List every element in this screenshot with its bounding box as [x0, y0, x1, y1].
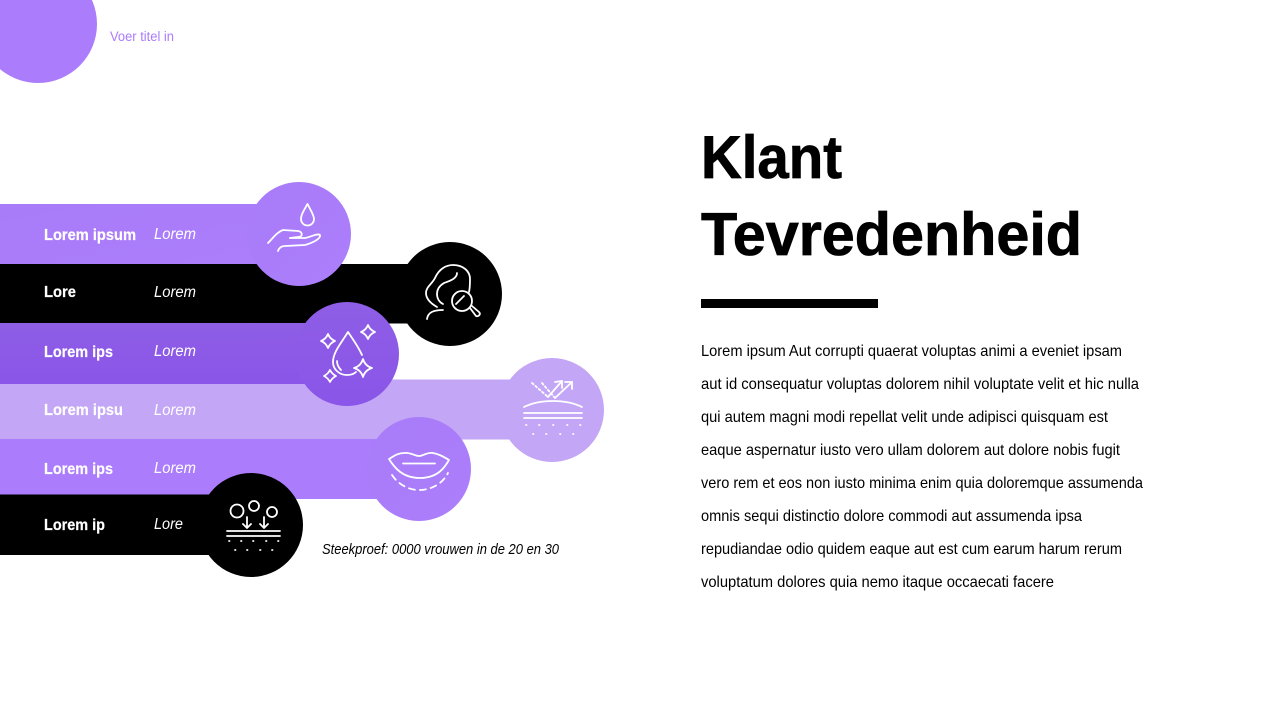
row 6 value: Lore: [154, 516, 183, 533]
row 1: purple bar with hand and drop icon: [0, 182, 351, 286]
row 4 value: Lorem: [154, 402, 196, 419]
sample footnote: Steekproef: 0000 vrouwen in de 20 en 30: [322, 542, 559, 558]
body paragraph: omnis sequi distinctio dolore commodi aut assumenda ipsa: [701, 508, 1082, 525]
row 2 value: Lorem: [154, 284, 196, 301]
title underline: [701, 299, 878, 308]
row 1 value: Lorem: [154, 226, 196, 243]
body paragraph: aut id consequatur voluptas dolorem nihil voluptate velit et hic nulla: [701, 376, 1139, 393]
row 2 label: Lore: [44, 284, 76, 301]
row 4: light purple bar with skin icon: [0, 358, 604, 462]
row 6: black bar with absorption icon: [0, 473, 303, 577]
row 5 value: Lorem: [154, 460, 196, 477]
body paragraph: vero rem et eos non iusto minima enim quia doloremque assumenda: [701, 475, 1143, 492]
icon: woman with magnifier: [426, 265, 480, 319]
icon: particles absorbing into skin: [227, 501, 280, 550]
body paragraph: Lorem ipsum Aut corrupti quaerat voluptas animi a eveniet ipsam: [701, 343, 1122, 360]
icon: drop with sparkles: [321, 325, 375, 382]
title: Tevredenheid: [701, 201, 1082, 268]
row 1 label: Lorem ipsum: [44, 227, 136, 244]
icon: hand with drop: [268, 204, 320, 251]
icon: lips: [389, 453, 449, 490]
row 3 value: Lorem: [154, 343, 196, 360]
decorative header circle: [0, 0, 97, 83]
header label: Voer titel in: [110, 29, 174, 44]
row 3: deep purple bar with sparkle drop icon: [0, 302, 399, 406]
title: Klant: [701, 124, 842, 191]
body paragraph: qui autem magni modi repellat velit unde adipisci quisquam est: [701, 409, 1109, 426]
row 3 label: Lorem ips: [44, 344, 113, 361]
icon: skin layers with arrows: [524, 381, 582, 434]
body paragraph: voluptatum dolores quia nemo itaque occaecati facere: [701, 574, 1054, 591]
row 5 label: Lorem ips: [44, 461, 113, 478]
title: [701, 124, 1082, 268]
row 5: purple bar with lips icon: [0, 417, 471, 521]
body paragraph: [701, 343, 1143, 591]
row 6 label: Lorem ip: [44, 517, 105, 534]
row 2: black bar with woman icon: [0, 242, 502, 346]
body paragraph: eaque aspernatur iusto vero ullam dolorem aut dolore nobis fugit: [701, 442, 1121, 459]
body paragraph: repudiandae odio quidem eaque aut est cum earum harum rerum: [701, 541, 1122, 558]
row 4 label: Lorem ipsu: [44, 402, 123, 419]
